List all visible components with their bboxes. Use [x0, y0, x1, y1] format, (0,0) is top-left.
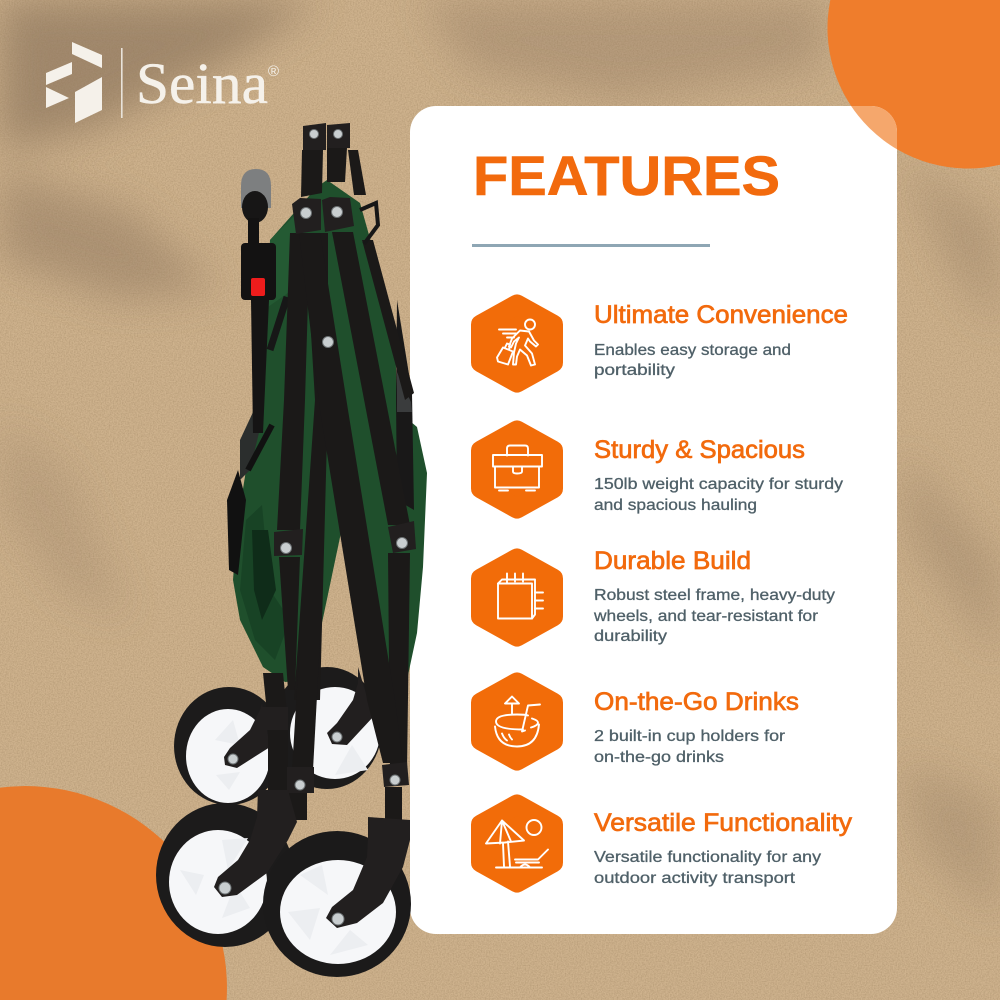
- feature: versatile functionality: [481, 804, 853, 887]
- heading: On-the-Go Drinks: [594, 688, 799, 716]
- feature: on-the-go drinks: [481, 682, 799, 766]
- icon: beach umbrella and lounger: [481, 804, 553, 882]
- description: and spacious hauling: [594, 497, 757, 514]
- features card: [410, 106, 897, 934]
- left long tube: [277, 233, 310, 690]
- orange circle: bottom left: [0, 786, 227, 1000]
- description: [593, 587, 835, 645]
- center post: [263, 673, 288, 797]
- strap loop: [360, 203, 378, 244]
- icon: walking person with luggage: [481, 304, 553, 382]
- folded wagon: [156, 123, 427, 977]
- description: Versatile functionality for any: [594, 849, 821, 866]
- mid brackets: [274, 521, 416, 556]
- logo mark: [46, 42, 102, 123]
- orange circle: top right: [827, 0, 1000, 168]
- description: [594, 342, 791, 379]
- icon: reinforced frame: [481, 558, 553, 636]
- title: FEATURES: [473, 144, 780, 207]
- description: Enables easy storage and: [594, 342, 791, 359]
- feature: sturdy and spacious: [481, 430, 843, 514]
- low brackets: [287, 762, 409, 827]
- feature: ultimate convenience: [481, 301, 848, 382]
- description: [594, 849, 821, 887]
- description: [594, 476, 843, 514]
- description: 2 built-in cup holders for: [594, 728, 786, 745]
- logo: [46, 42, 279, 123]
- front forks: [214, 790, 410, 928]
- description: on-the-go drinks: [594, 749, 724, 766]
- heading: Versatile Functionality: [594, 809, 853, 837]
- back forks: [224, 667, 373, 768]
- back wheels: [174, 667, 382, 805]
- heading: Durable Build: [594, 547, 751, 575]
- heading: Ultimate Convenience: [594, 301, 848, 329]
- description: durability: [594, 628, 667, 645]
- centre tube: [288, 233, 328, 820]
- heading: Sturdy & Spacious: [594, 436, 805, 464]
- description: [594, 728, 786, 766]
- logo wordmark: Seina: [136, 51, 268, 116]
- description: wheels, and tear-resistant for: [593, 608, 819, 625]
- back frame tubes: [301, 123, 414, 400]
- description: 150lb weight capacity for sturdy: [594, 476, 843, 493]
- right long tube: [332, 232, 410, 770]
- top brackets: [292, 197, 354, 348]
- fabric bag: [227, 180, 427, 702]
- description: portability: [594, 362, 675, 379]
- logo: ®: [268, 63, 279, 80]
- handle: [241, 169, 276, 433]
- front right wheel: [263, 831, 411, 977]
- icon: toolbox: [481, 430, 553, 508]
- icon: coconut drink: [481, 682, 553, 760]
- description: outdoor activity transport: [594, 870, 796, 887]
- description: Robust steel frame, heavy-duty: [594, 587, 835, 604]
- main diagonal tube: [299, 233, 403, 763]
- post bracket: [262, 707, 288, 730]
- front left wheel: [156, 803, 294, 947]
- feature: durable build: [481, 547, 835, 645]
